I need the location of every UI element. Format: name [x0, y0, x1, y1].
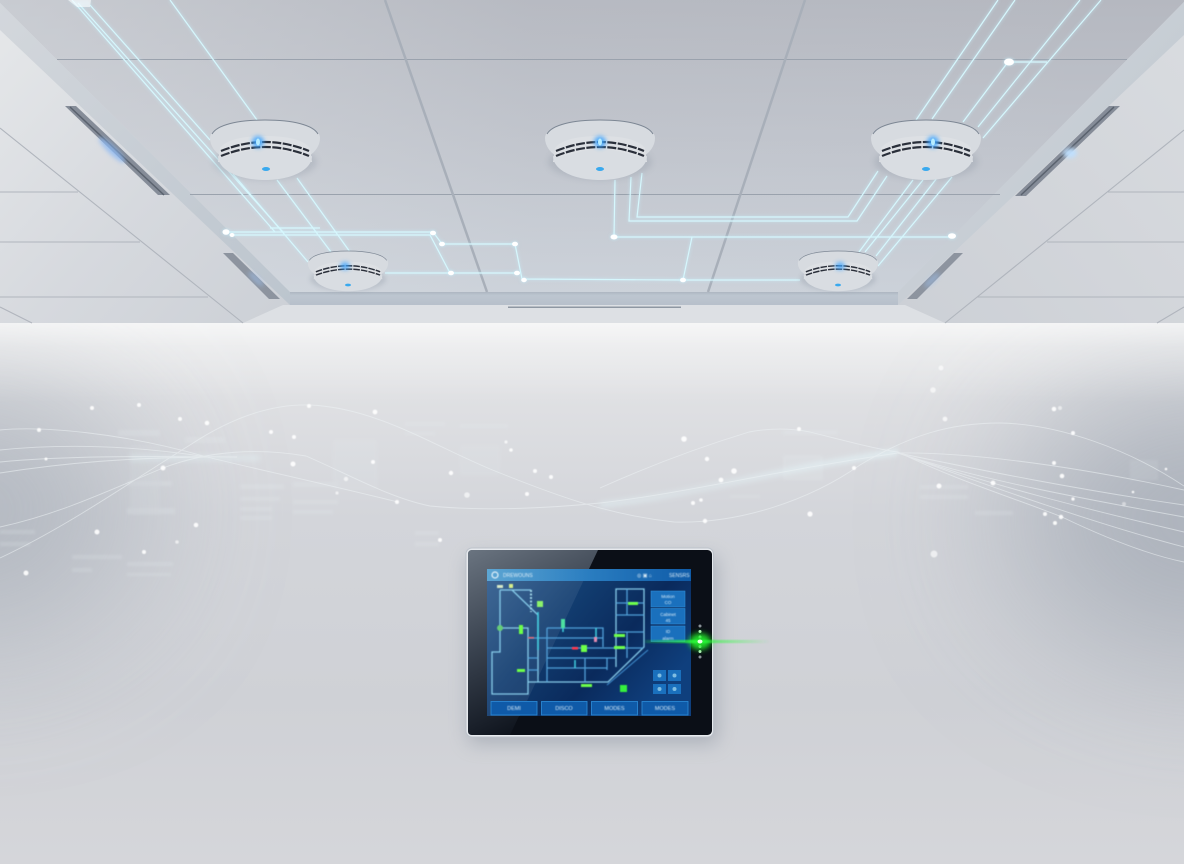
perimeter beam left [0, 3, 290, 305]
bottom navigation buttons: DEMI [507, 706, 521, 712]
side button labels: Cabinet [660, 612, 677, 617]
bottom navigation buttons: MODES [604, 706, 625, 712]
smoke detector: top centre [545, 120, 655, 180]
left soffit [0, 0, 290, 323]
centre recessed ceiling [0, 0, 1184, 292]
bottom navigation buttons: DISCO [555, 706, 573, 712]
green light beam [645, 634, 770, 650]
tile grid lines [0, 0, 1184, 323]
status LEDs [698, 624, 702, 658]
small icon buttons [653, 670, 681, 694]
side button labels: Motion [661, 594, 675, 599]
side button labels [660, 594, 677, 641]
tablet frame [466, 548, 714, 737]
side button labels: ID [666, 629, 671, 634]
tablet drop shadow [468, 556, 718, 744]
screen header bar [487, 569, 691, 581]
bottom navigation buttons: MODES [655, 706, 675, 712]
wave lines [0, 405, 1184, 562]
screen [487, 569, 691, 716]
floor plan [492, 589, 648, 694]
tablet glass [468, 550, 712, 735]
faint holographic data panels [0, 422, 1158, 576]
perimeter beam front [290, 292, 898, 306]
smoke detector: lower right [798, 251, 878, 291]
screen header bar: ◎ ▣ ⌂ [637, 573, 652, 579]
wire junction nodes [68, 0, 1014, 282]
air vents [65, 106, 1120, 299]
perimeter beam right [898, 2, 1184, 305]
sensor markers [497, 584, 638, 692]
luminous ribbon [130, 452, 898, 505]
side control buttons [651, 591, 685, 642]
side button labels: CO [665, 600, 672, 605]
glowing network wires [72, 0, 1101, 280]
screen header bar: DREWOUNS [503, 573, 533, 579]
glowing particles [24, 366, 1167, 576]
glass reflection [468, 550, 598, 735]
wall control tablet [466, 548, 770, 744]
screen header bar: SENSRS [669, 573, 690, 579]
smoke detector: top right [871, 120, 981, 180]
side button labels: alarm [662, 636, 674, 641]
smoke detector: lower left [308, 251, 388, 291]
smoke detector: top left [210, 120, 320, 180]
wall background [0, 323, 1184, 730]
bottom navigation buttons [491, 702, 688, 715]
ceiling [0, 0, 1184, 323]
side button labels: 45 [665, 618, 671, 623]
right soffit [898, 0, 1184, 323]
flowing data waves [0, 405, 1184, 562]
front ledge [243, 305, 945, 323]
